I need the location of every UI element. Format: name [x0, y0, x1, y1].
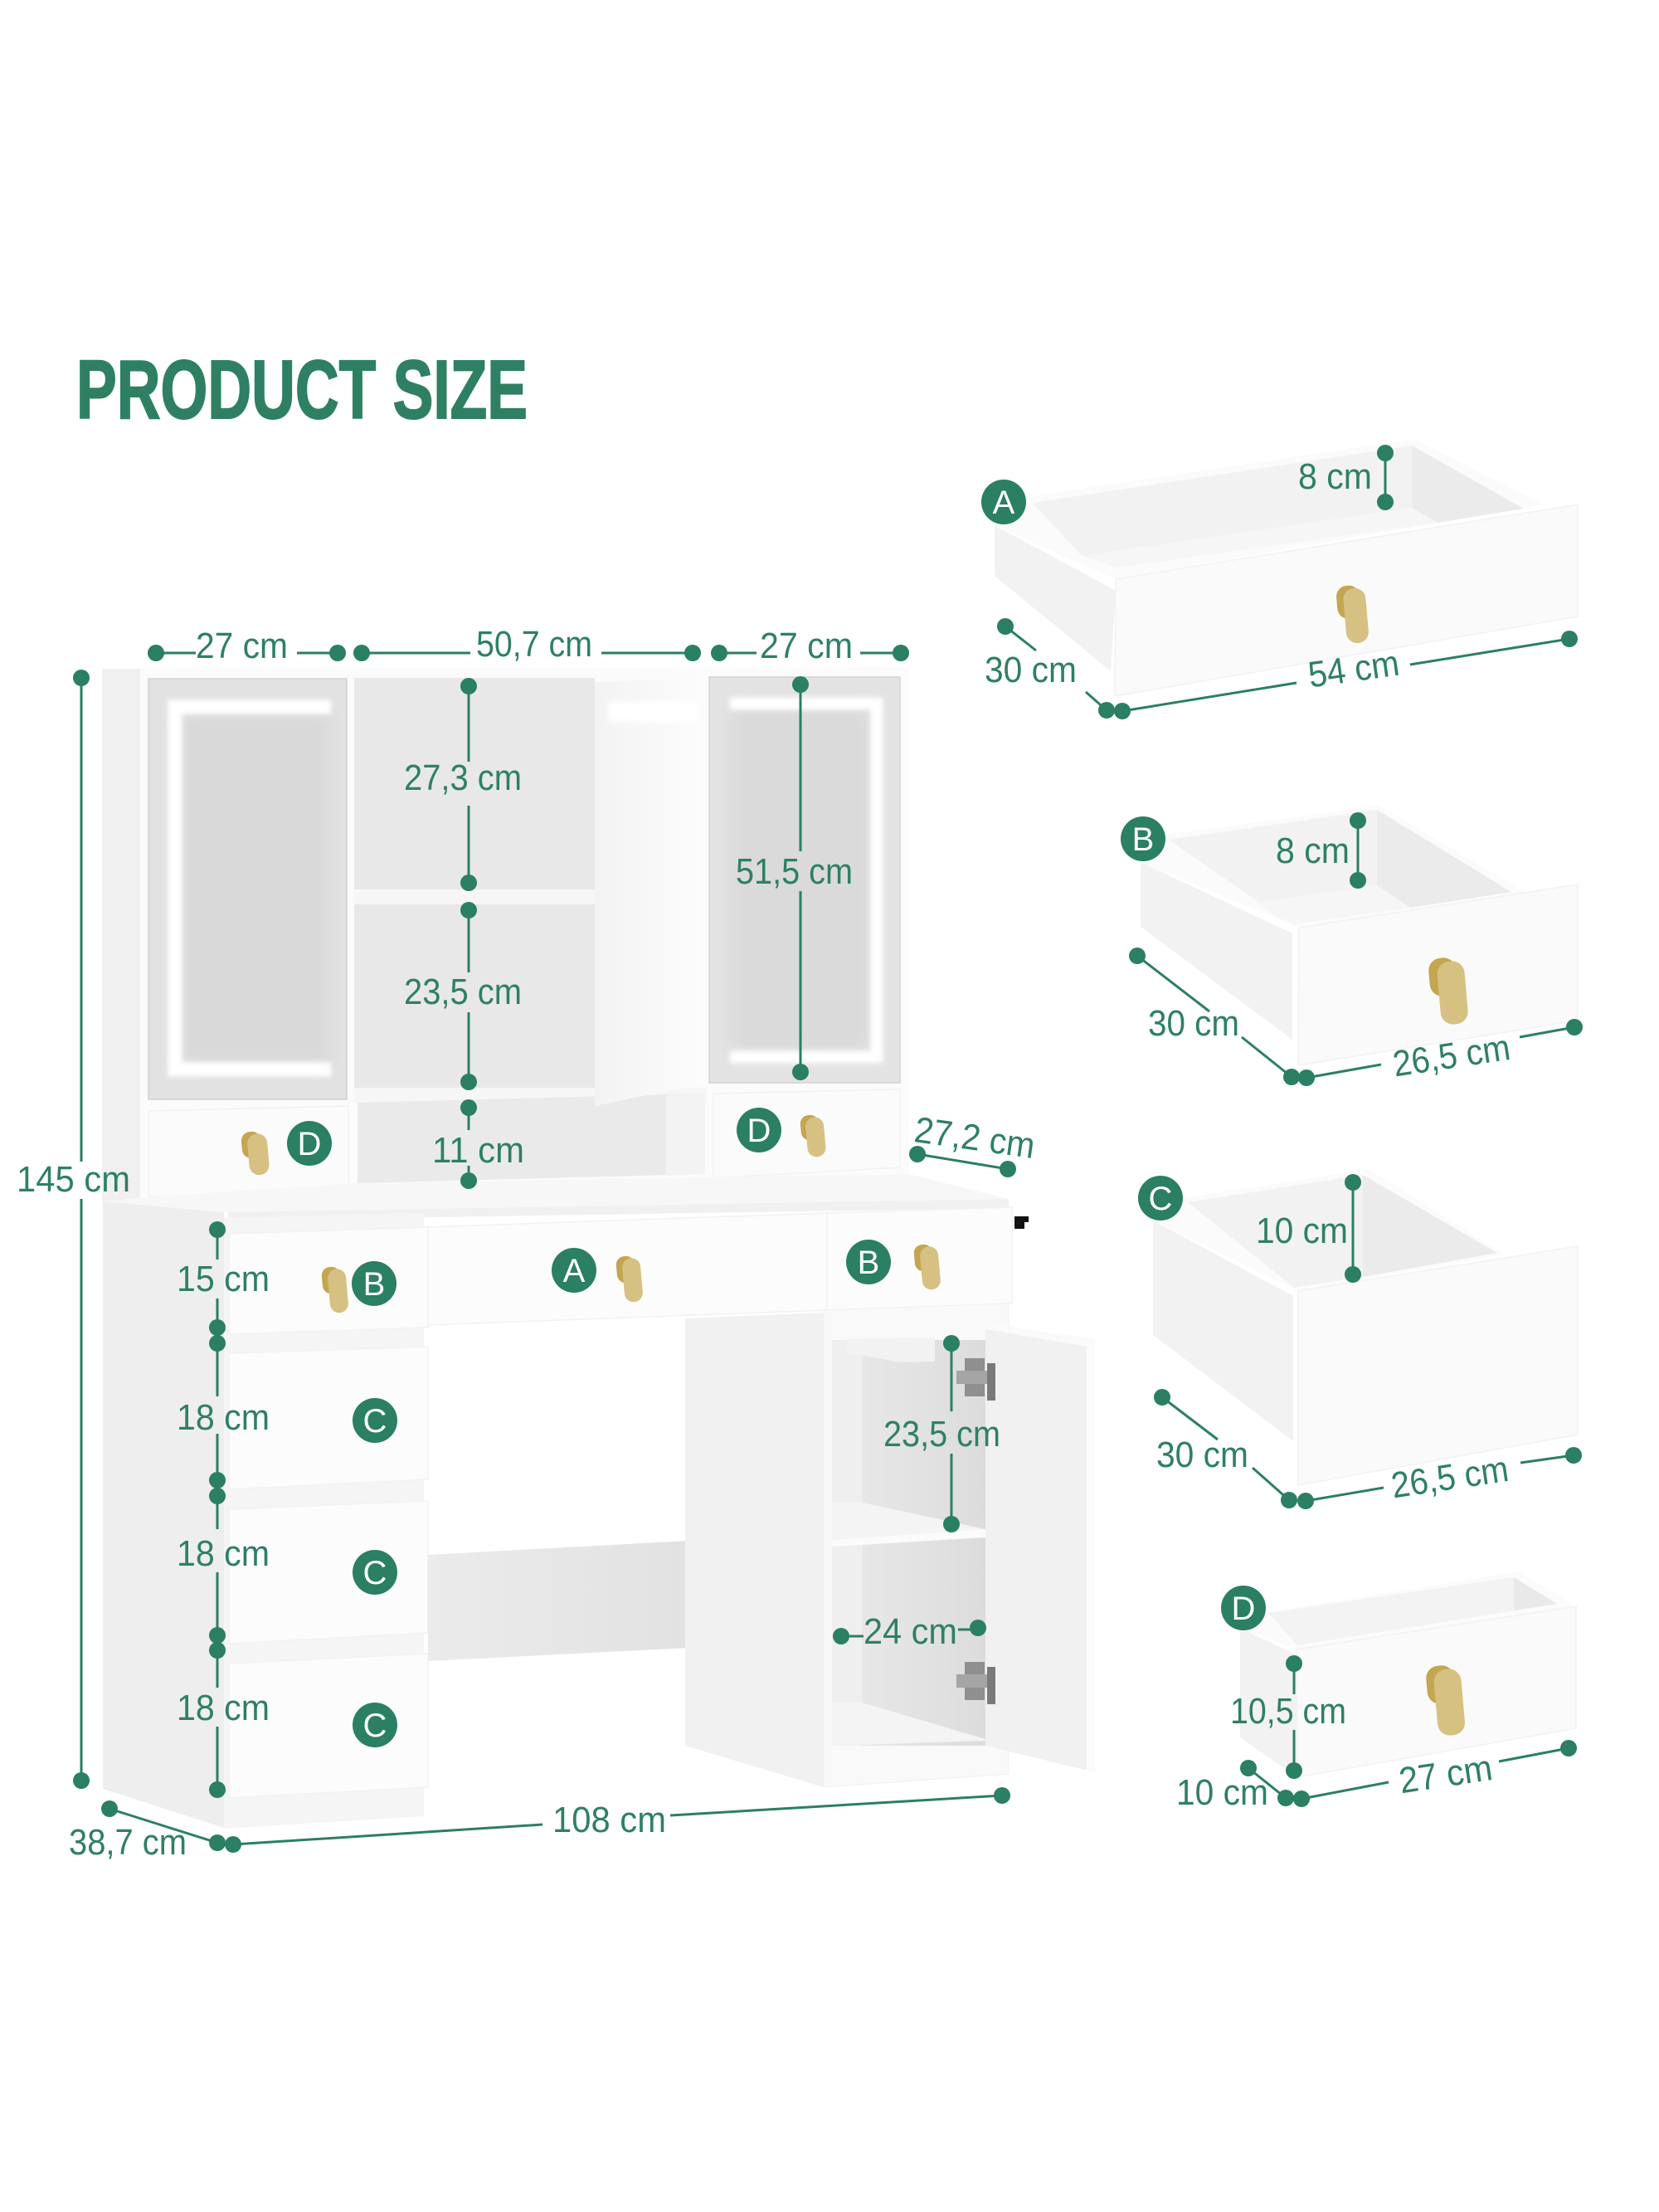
badge: center A	[552, 1248, 596, 1293]
badge: right B: B	[858, 1245, 879, 1281]
handle: right D	[800, 1114, 826, 1158]
dimension 8 cm	[1276, 812, 1366, 889]
drawer B handle	[1428, 956, 1469, 1026]
drawer A handle	[1335, 584, 1370, 645]
dimension 27 cm: 27 cm	[1396, 1747, 1495, 1801]
dimension: 15 cm	[177, 1221, 270, 1336]
badge: right B	[846, 1240, 891, 1284]
badge: right D: D	[747, 1113, 771, 1149]
left pedestal drawers	[224, 1213, 428, 1829]
dimension: 108 cm: 108 cm	[552, 1800, 666, 1840]
drawer D handle	[1425, 1664, 1466, 1737]
dimension 10,5 cm: 10,5 cm	[1230, 1691, 1346, 1732]
dimension: total height 145 cm	[17, 670, 130, 1789]
handle: left D	[241, 1130, 270, 1177]
dimension: 18 cm second	[177, 1488, 270, 1644]
badge C: C	[1149, 1181, 1172, 1217]
badge: center A: A	[563, 1253, 586, 1289]
badge: C second: C	[363, 1555, 387, 1591]
handle: A	[615, 1255, 644, 1303]
handle: left B	[321, 1265, 349, 1314]
dimension: 15 cm: 15 cm	[177, 1259, 270, 1299]
dimension: top left 27 cm	[148, 626, 346, 666]
right pedestal side	[685, 1313, 824, 1787]
dimension 8 cm: 8 cm	[1298, 456, 1372, 497]
dimension 10 cm: 10 cm	[1256, 1211, 1348, 1251]
dimension 26,5 cm	[1298, 1019, 1583, 1086]
dimension 30 cm	[1129, 948, 1300, 1085]
dimension 27 cm	[1293, 1740, 1577, 1807]
dimension 8 cm	[1298, 445, 1394, 510]
badge: left B	[352, 1261, 397, 1306]
dimension: 51,5 cm: 51,5 cm	[736, 851, 853, 892]
dimension 8 cm: 8 cm	[1276, 831, 1350, 871]
right cabinet	[824, 1303, 1009, 1787]
dimension: 18 cm first	[177, 1335, 270, 1488]
dimension: 18 cm third: 18 cm	[177, 1688, 270, 1728]
drawer C	[1138, 1169, 1582, 1509]
dimension: 23,5 cm	[404, 902, 522, 1090]
handle: right B	[913, 1243, 941, 1291]
dimension 10,5 cm	[1230, 1655, 1346, 1779]
dimension 54 cm	[1114, 631, 1578, 719]
plug icon	[1014, 1216, 1029, 1229]
vanity dimensions	[17, 624, 1038, 1863]
upper hinge	[956, 1358, 995, 1401]
badge: right D	[737, 1108, 781, 1152]
dimension: 11 cm	[432, 1099, 524, 1189]
desktop	[103, 1174, 1009, 1220]
dimension: top right 27 cm: 27 cm	[760, 626, 853, 666]
badge: left D	[287, 1121, 332, 1166]
drawer B body	[1141, 806, 1578, 1065]
badge: C third: C	[363, 1708, 387, 1744]
dimension 26,5 cm	[1297, 1447, 1582, 1509]
drawer C body	[1153, 1169, 1578, 1485]
left pedestal side	[103, 1201, 224, 1828]
badge: C first	[353, 1398, 397, 1443]
lower hinge	[956, 1662, 995, 1704]
badge B: B	[1132, 821, 1154, 858]
dimension: 38,7 cm	[69, 1800, 226, 1863]
center drawer A	[428, 1213, 827, 1325]
badge: C second	[353, 1550, 397, 1595]
dimension 30 cm	[985, 618, 1115, 719]
dimension 30 cm	[1154, 1389, 1297, 1508]
dimension: 18 cm second: 18 cm	[177, 1533, 270, 1574]
dimension: 51,5 cm	[736, 676, 853, 1080]
dimension: 18 cm third	[177, 1642, 270, 1798]
drawer A body	[995, 439, 1578, 696]
badge: C third	[353, 1703, 397, 1747]
cabinet door	[985, 1323, 1095, 1772]
dimension: 23,5 cm: 23,5 cm	[404, 972, 522, 1012]
dimension: 11 cm: 11 cm	[432, 1130, 524, 1171]
left mirror door with LED	[148, 679, 347, 1099]
title: PRODUCT SIZE	[76, 343, 528, 436]
dimension: top center 50,7 cm	[353, 624, 701, 665]
dimension: 38,7 cm: 38,7 cm	[69, 1822, 187, 1863]
dimension: 27,2 cm: 27,2 cm	[912, 1109, 1038, 1167]
dimension 30 cm: 30 cm	[985, 650, 1077, 690]
dimension: top center 50,7 cm: 50,7 cm	[476, 624, 592, 665]
hutch body	[102, 667, 909, 1201]
dimension: 108 cm	[225, 1787, 1010, 1853]
dimension: cabinet 24 cm: 24 cm	[864, 1611, 957, 1652]
drawer D	[1176, 1571, 1577, 1813]
drawer B	[1121, 806, 1583, 1086]
badge B	[1121, 816, 1165, 861]
badge A: A	[993, 485, 1015, 521]
back beam	[428, 1541, 688, 1661]
dimension: top right 27 cm	[711, 626, 909, 666]
hutch drawers D	[148, 1089, 900, 1196]
badge A	[981, 480, 1026, 524]
dimension: 27,3 cm: 27,3 cm	[404, 758, 522, 798]
dimension: top left 27 cm: 27 cm	[196, 626, 288, 666]
dimension: 27,3 cm	[404, 678, 522, 891]
badge D: D	[1232, 1591, 1255, 1627]
dimension 10 cm	[1176, 1760, 1294, 1813]
badge: left D: D	[298, 1126, 321, 1162]
dimension: cabinet 23,5 cm	[883, 1335, 1000, 1532]
badge D	[1221, 1586, 1266, 1630]
badge C	[1138, 1176, 1183, 1220]
dimension 26,5 cm: 26,5 cm	[1389, 1449, 1511, 1506]
dimension 54 cm: 54 cm	[1306, 643, 1402, 696]
dimension 30 cm: 30 cm	[1156, 1435, 1248, 1475]
open center mirror door	[595, 678, 703, 1106]
right drawer B	[827, 1207, 1012, 1310]
right mirror door with LED	[709, 677, 900, 1083]
dimension 30 cm: 30 cm	[1148, 1003, 1239, 1044]
drawer D body	[1240, 1571, 1576, 1777]
vanity illustration	[102, 667, 1095, 1829]
badge: left B: B	[363, 1266, 385, 1303]
dimension: 18 cm first: 18 cm	[177, 1397, 270, 1438]
dimension: cabinet 23,5 cm: 23,5 cm	[883, 1414, 1000, 1454]
dimension 10 cm	[1256, 1174, 1361, 1283]
dimension: cabinet 24 cm	[833, 1611, 986, 1652]
badge: C first: C	[363, 1403, 387, 1440]
dimension: total height 145 cm: 145 cm	[17, 1159, 130, 1200]
drawer A	[981, 439, 1578, 719]
dimension 26,5 cm: 26,5 cm	[1390, 1027, 1513, 1084]
dimension 10 cm: 10 cm	[1176, 1772, 1268, 1813]
